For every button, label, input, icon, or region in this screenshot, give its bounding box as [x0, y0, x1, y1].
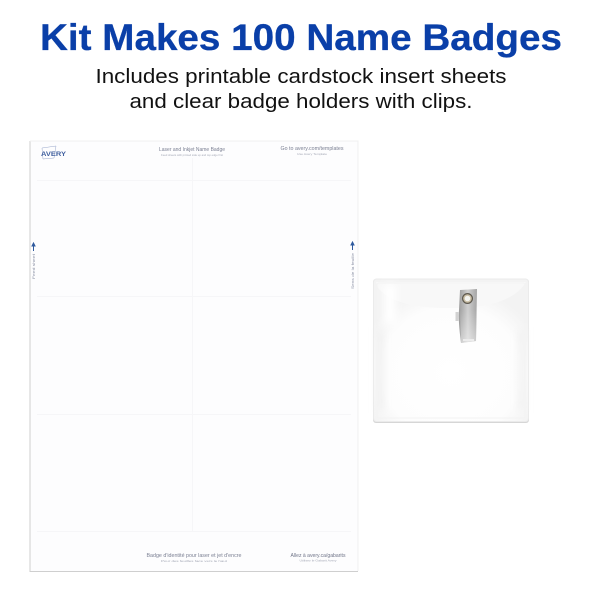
subtitle: Includes printable cardstock insert sheets [96, 66, 506, 88]
top right label [280, 146, 344, 156]
icon: metal clip [456, 289, 477, 343]
bottom right label [290, 553, 346, 562]
subtitle [96, 66, 506, 113]
left feed arrow: Feed sheet [31, 253, 36, 279]
left feed arrow [31, 243, 36, 279]
panel: clear badge holder [373, 279, 529, 423]
top centre label: Feed sheets with printed side up and top edge first [161, 153, 223, 157]
bottom right label: Utilisez le Gabarit Avery [300, 558, 337, 562]
title: Kit Makes 100 Name Badges [40, 17, 562, 58]
holder highlights [377, 284, 525, 410]
bottom right label: Allez à avery.ca/gabarits [290, 553, 346, 559]
top right label: Use Avery Template [297, 152, 327, 156]
panel: insert sheet [30, 141, 358, 572]
top right label: Go to avery.com/templates [280, 146, 344, 152]
bottom centre label: Badge d'identité pour laser et jet d'encre [146, 553, 242, 559]
inner border [377, 283, 525, 418]
logo: Avery [41, 146, 67, 159]
top centre label: Laser and Inkjet Name Badge [159, 147, 225, 153]
perforation grid [37, 158, 351, 532]
bottom centre label [146, 553, 242, 563]
right feed arrow [350, 242, 355, 289]
subtitle: and clear badge holders with clips. [130, 91, 472, 113]
right feed arrow: Sens de la feuille [350, 252, 355, 289]
holder flap [376, 282, 526, 308]
top centre label [159, 147, 225, 157]
bottom centre label: Pour des feuilles face vers le haut [161, 559, 227, 563]
logo: Avery: AVERY [41, 151, 67, 158]
